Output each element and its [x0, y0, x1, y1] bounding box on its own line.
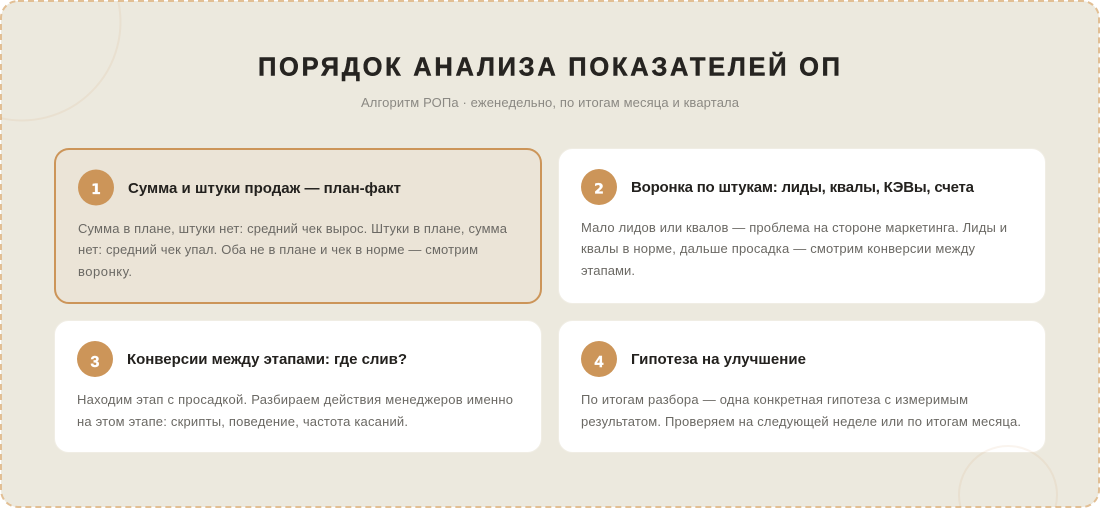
text: step 2: квалы в норме, дальше просадка — смотрим конверсии между — [581, 241, 976, 256]
text: step 4: результатом. Проверяем на следующей неделе или по итогам месяца. — [581, 414, 1021, 429]
text: step 1: Сумма в плане, штуки нет: средний чек вырос. Штуки в плане, сумма — [78, 221, 508, 236]
text: step 3: Находим этап с просадкой. Разбираем действия менеджеров именно — [77, 392, 513, 407]
panel: step 4 — [558, 320, 1046, 452]
icon: number 2 — [581, 169, 617, 205]
title: ПОРЯДОК АНАЛИЗА ПОКАЗАТЕЛЕЙ ОП — [258, 52, 840, 82]
panel: step 3 — [54, 320, 542, 452]
icon: number 1 — [78, 170, 114, 206]
icon: number 3 — [77, 341, 113, 377]
text: step 2 — [581, 220, 1007, 278]
icon: number 4 — [581, 341, 617, 377]
heading: step 4: Гипотеза на улучшение — [631, 351, 806, 368]
icon: number 4: 4 — [595, 354, 604, 371]
panel: step 1 — [55, 149, 541, 303]
heading: step 1: Сумма и штуки продаж — план-факт — [128, 180, 401, 197]
icon: number 3: 3 — [91, 354, 100, 371]
heading: step 2: Воронка по штукам: лиды, квалы, КЭВы, счета — [631, 179, 975, 196]
decorative circle: top left — [1, 1, 120, 120]
decorative circle: bottom right — [959, 446, 1057, 507]
panel: step 2 — [558, 148, 1046, 304]
text: step 1: нет: средний чек упал. Оба не в плане и чек в норме — смотрим — [78, 242, 478, 257]
subtitle: Алгоритм РОПа · еженедельно, по итогам месяца и квартала — [361, 95, 740, 110]
text: step 1: воронку. — [78, 264, 132, 279]
text: step 3 — [77, 392, 513, 429]
text: step 1 — [78, 221, 508, 279]
icon: number 1: 1 — [91, 182, 101, 198]
icon: number 2: 2 — [594, 182, 604, 198]
text: step 2: Мало лидов или квалов — проблема на стороне маркетинга. Лиды и — [581, 220, 1007, 235]
heading: step 3: Конверсии между этапами: где слив? — [127, 351, 407, 368]
text: step 2: этапами. — [581, 263, 635, 278]
text: step 4: По итогам разбора — одна конкретная гипотеза с измеримым — [581, 392, 968, 407]
text: step 4 — [581, 392, 1021, 429]
text: step 3: на этом этапе: скрипты, поведение, частота касаний. — [77, 414, 408, 429]
